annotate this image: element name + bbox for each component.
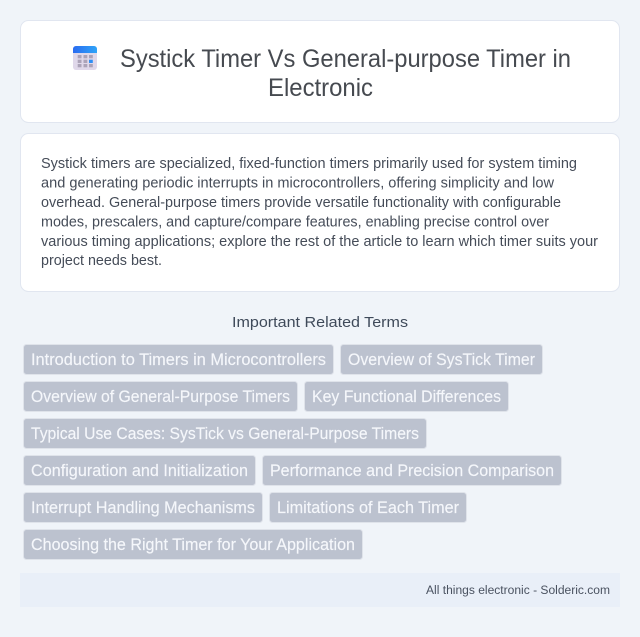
footer <box>20 573 620 607</box>
related terms chips: Configuration and Initialization <box>31 461 248 480</box>
heading: important related terms: Important Related Terms <box>232 314 408 331</box>
related terms chips: Key Functional Differences <box>312 387 501 406</box>
panel: header card <box>20 20 620 122</box>
related terms chips: Overview of General-Purpose Timers <box>31 387 290 406</box>
icon: calendar <box>73 46 97 70</box>
title <box>120 45 571 102</box>
summary text: modes, prescalers, and capture/compare features, enabling precise control over <box>41 214 549 230</box>
related terms chips: Limitations of Each Timer <box>277 498 459 517</box>
summary text: overhead. General-purpose timers provide versatile functionality with configurable <box>41 195 561 211</box>
related terms chips: Overview of SysTick Timer <box>348 350 535 369</box>
related terms chips <box>24 344 562 560</box>
summary text: and generating periodic interrupts in microcontrollers, offering simplicity and low <box>41 176 554 192</box>
panel: summary card <box>20 134 620 292</box>
related terms chips: Choosing the Right Timer for Your Application <box>31 535 355 554</box>
related terms chips: Performance and Precision Comparison <box>270 461 554 480</box>
title: Systick Timer Vs General-purpose Timer in <box>120 45 571 73</box>
footer: All things electronic - Solderic.com <box>426 583 610 597</box>
summary text: various timing applications; explore the rest of the article to learn which timer suits your <box>41 234 598 250</box>
summary text: project needs best. <box>41 253 162 269</box>
related terms chips: Interrupt Handling Mechanisms <box>31 498 255 517</box>
summary text: Systick timers are specialized, fixed-function timers primarily used for system timing <box>41 156 577 172</box>
title: Electronic <box>268 74 373 102</box>
summary text <box>41 156 598 269</box>
related terms chips: Introduction to Timers in Microcontrollers <box>31 350 326 369</box>
related terms chips: Typical Use Cases: SysTick vs General-Purpose Timers <box>31 424 419 443</box>
